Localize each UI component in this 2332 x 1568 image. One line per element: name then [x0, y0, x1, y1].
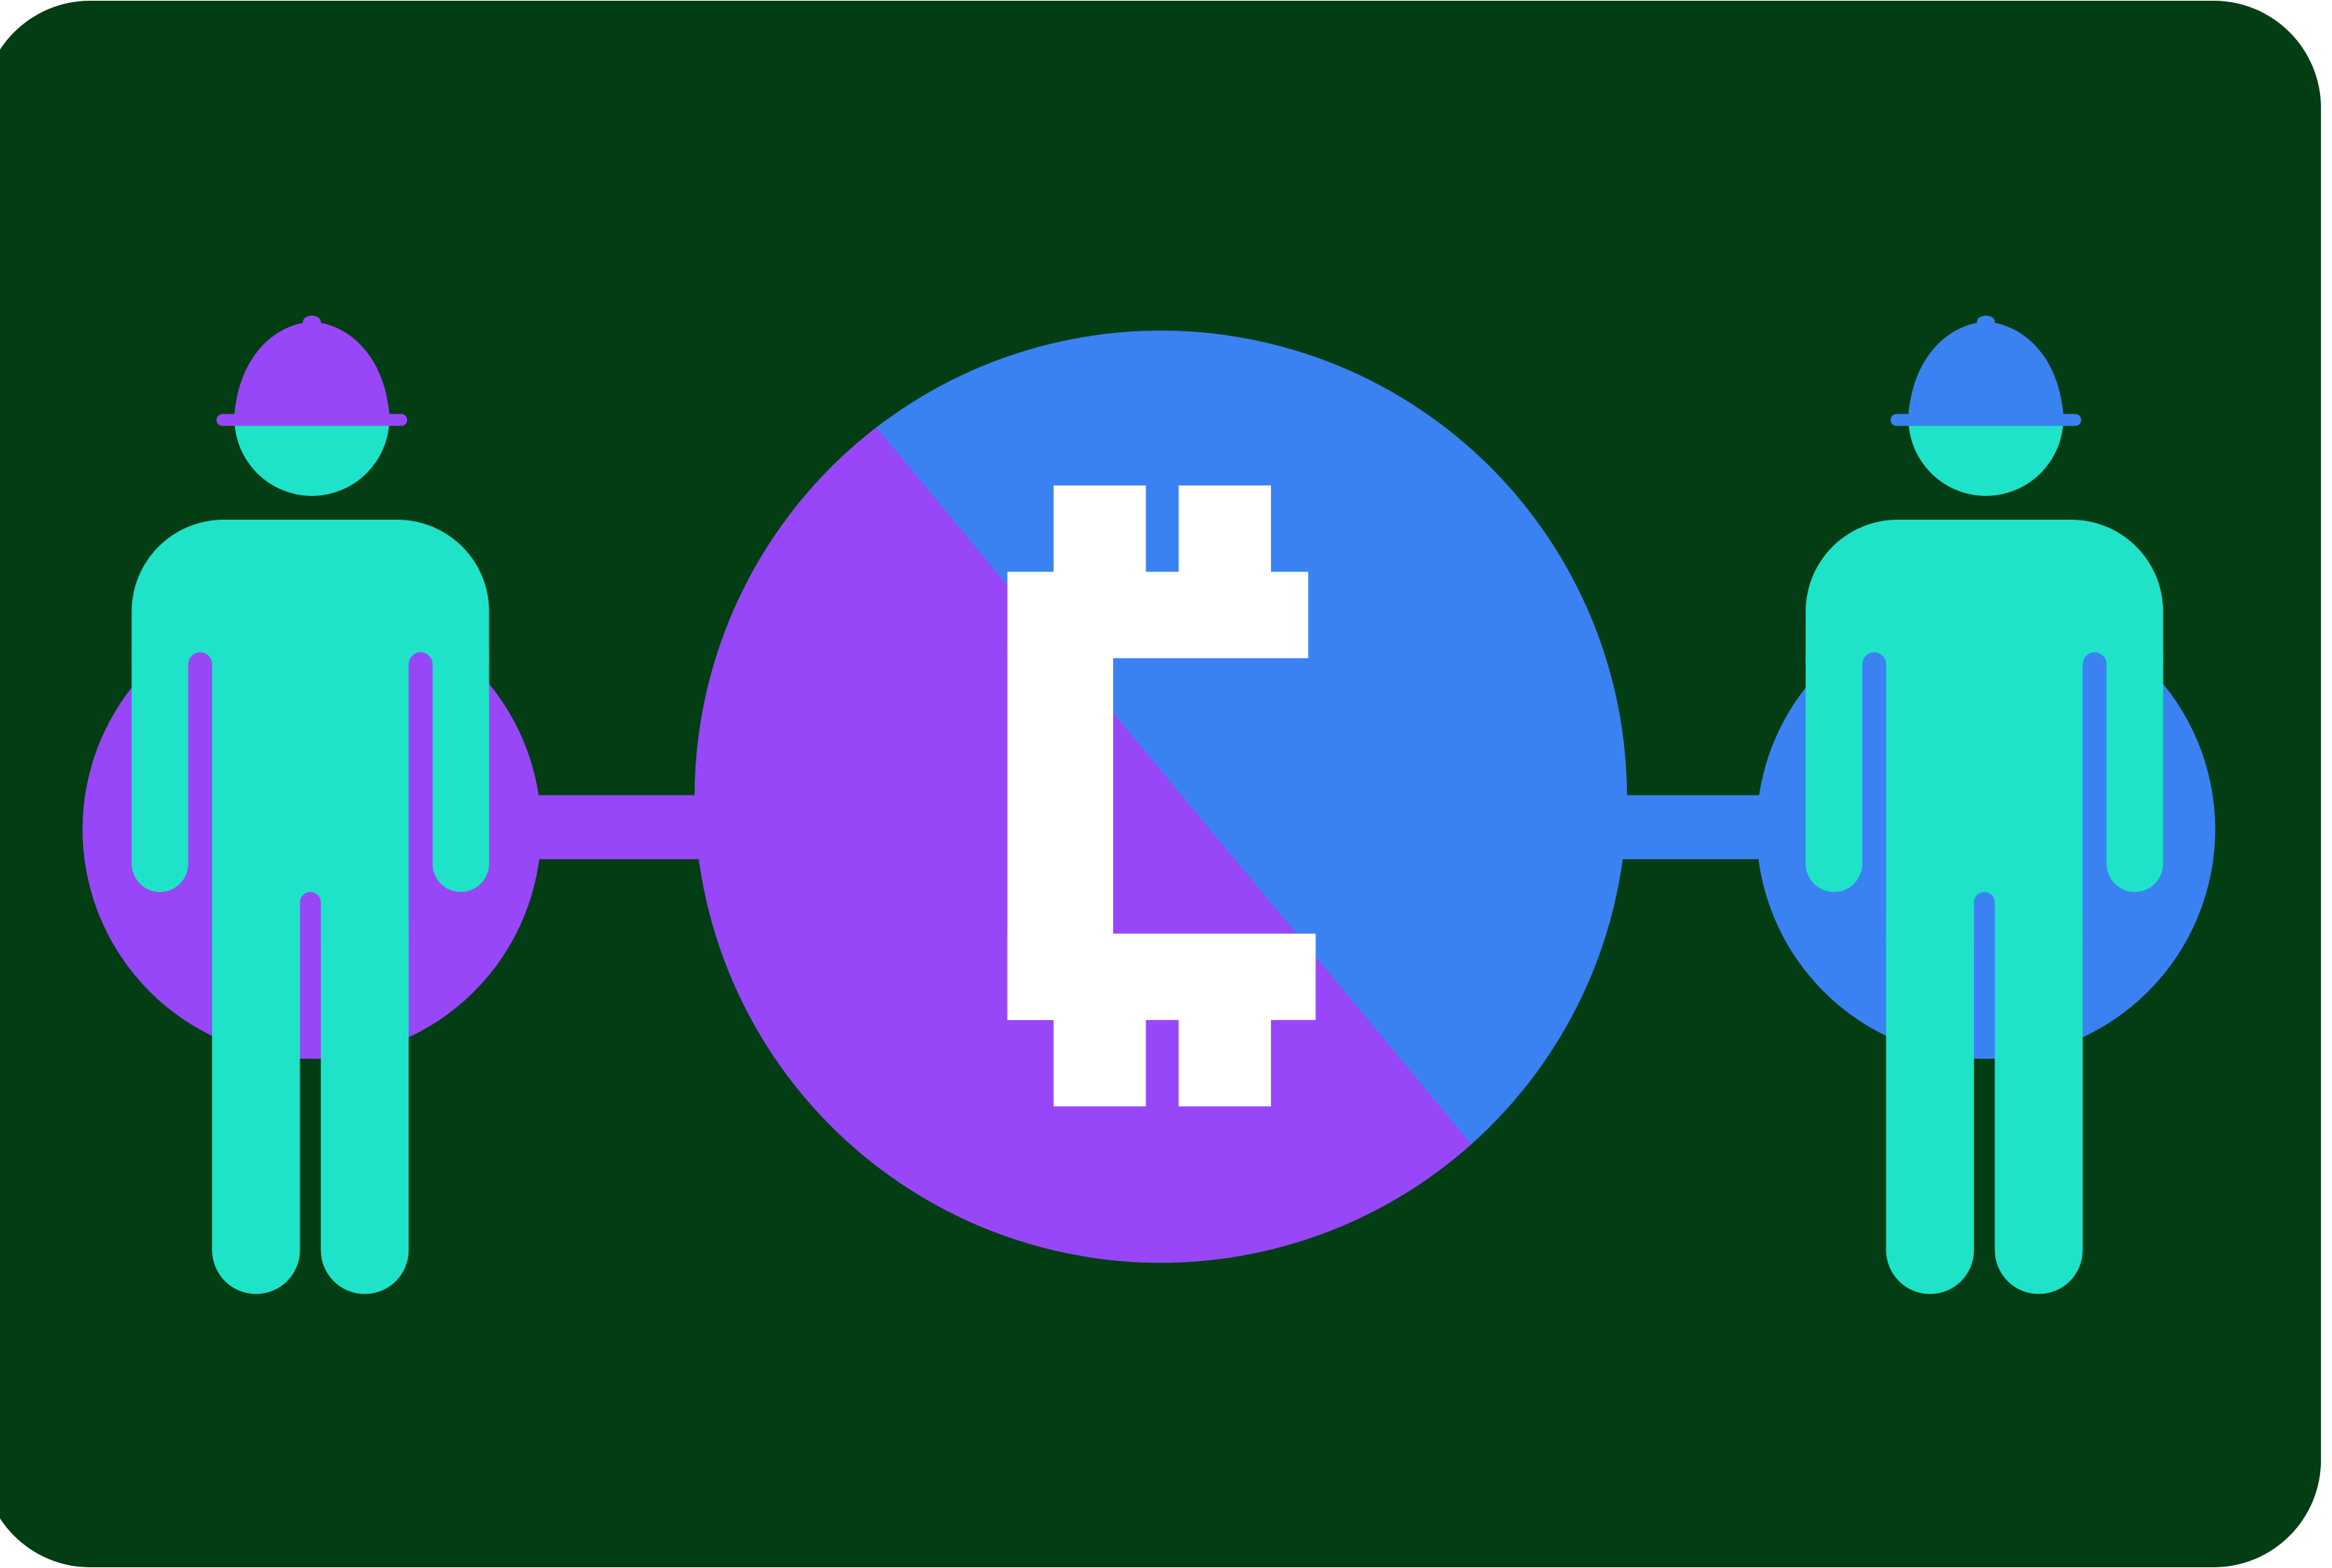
connector bar left	[507, 795, 716, 859]
connector bar right	[1609, 795, 1788, 859]
icon: coin symbol	[1008, 486, 1315, 1106]
central coin	[694, 331, 1627, 1263]
left worker	[82, 316, 541, 1297]
right worker	[1757, 316, 2216, 1297]
icon: hard hat	[217, 316, 407, 426]
icon: hard hat right	[1891, 316, 2081, 426]
